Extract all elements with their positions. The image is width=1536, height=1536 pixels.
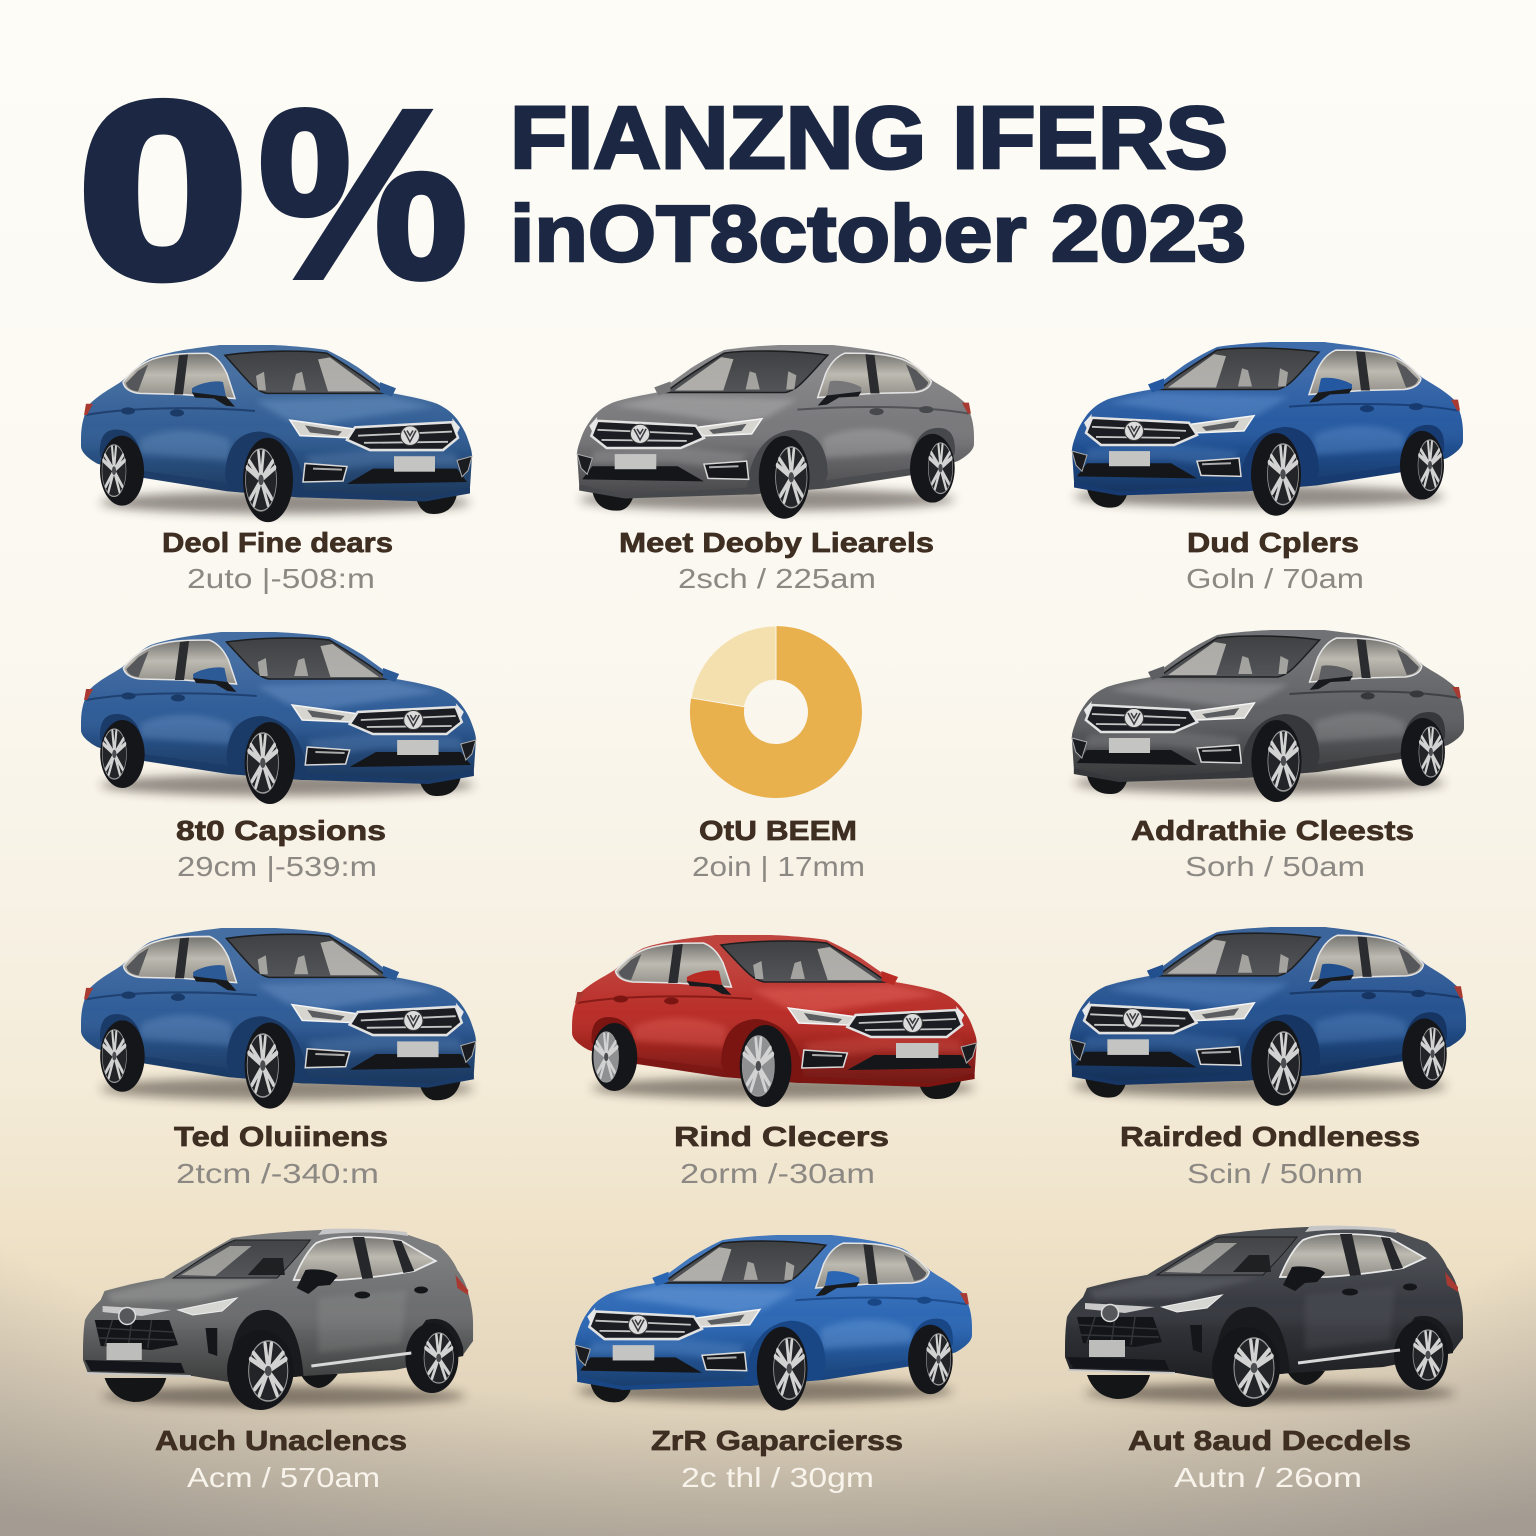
card: Rind Clecers xyxy=(572,935,977,1189)
sublabel: Acm / 570am xyxy=(187,1462,380,1493)
sublabel: Goln / 70am xyxy=(1186,563,1364,594)
sublabel: 29cm |-539:m xyxy=(177,851,377,882)
sublabel: 2uto |-508:m xyxy=(187,563,375,594)
card: Ted Oluiinens xyxy=(81,928,476,1189)
heading line 2: inOT8ctober 2023 xyxy=(510,189,1246,278)
label: Deol Fine dears xyxy=(162,527,393,558)
donut chart xyxy=(690,626,862,798)
sublabel: 2sch / 225am xyxy=(678,563,876,594)
car image xyxy=(1065,1226,1463,1407)
title: big 0% xyxy=(78,51,468,329)
sublabel: Scin / 50nm xyxy=(1187,1158,1363,1189)
car image xyxy=(1072,342,1463,516)
car image xyxy=(1072,630,1464,802)
label: Addrathie Cleests xyxy=(1131,815,1414,846)
label: Dud Cplers xyxy=(1187,527,1359,558)
label: ZrR Gaparcierss xyxy=(651,1425,903,1456)
car image xyxy=(577,345,974,519)
card: Deol Fine dears xyxy=(81,345,472,594)
label: OtU BEEM xyxy=(699,815,857,846)
card: Meet Deoby Liearels xyxy=(577,345,974,594)
card: Dud Cplers xyxy=(1072,342,1463,594)
car image xyxy=(575,1235,972,1410)
label: Ted Oluiinens xyxy=(174,1121,388,1152)
light segment xyxy=(691,626,776,707)
heading line 1: FIANZNG IFERS xyxy=(510,88,1228,187)
car image xyxy=(81,632,476,804)
card: ZrR Gaparcierss xyxy=(575,1235,972,1493)
sublabel: 2tcm /-340:m xyxy=(176,1158,379,1189)
label: Meet Deoby Liearels xyxy=(619,527,934,558)
label: Auch Unaclencs xyxy=(155,1425,407,1456)
label: Aut 8aud Decdels xyxy=(1128,1425,1411,1456)
label: Rind Clecers xyxy=(674,1121,889,1152)
title: big 0%: 0 xyxy=(78,51,248,329)
card: 8t0 Capsions xyxy=(81,632,476,882)
sublabel: 2c thl / 30gm xyxy=(681,1462,874,1493)
sublabel: 2orm /-30am xyxy=(680,1158,875,1189)
sublabel: 2oin | 17mm xyxy=(692,851,865,882)
car image xyxy=(1070,927,1466,1106)
sublabel: Autn / 26om xyxy=(1174,1462,1362,1493)
card: Rairded Ondleness xyxy=(1070,927,1466,1189)
label: 8t0 Capsions xyxy=(176,815,386,846)
sublabel: Sorh / 50am xyxy=(1185,851,1365,882)
car image xyxy=(81,928,476,1109)
card: Otu BEEM with donut chart xyxy=(690,626,865,882)
car image xyxy=(83,1229,473,1410)
card: Auch Unaclencs xyxy=(83,1229,473,1493)
main segment xyxy=(690,626,862,798)
car image xyxy=(81,345,472,522)
card: Addrathie Cleests xyxy=(1072,630,1464,882)
card: Aut 8aud Decdels xyxy=(1065,1226,1463,1493)
car image xyxy=(572,935,977,1107)
label: Rairded Ondleness xyxy=(1120,1121,1420,1152)
title: big 0%: % xyxy=(258,60,468,328)
